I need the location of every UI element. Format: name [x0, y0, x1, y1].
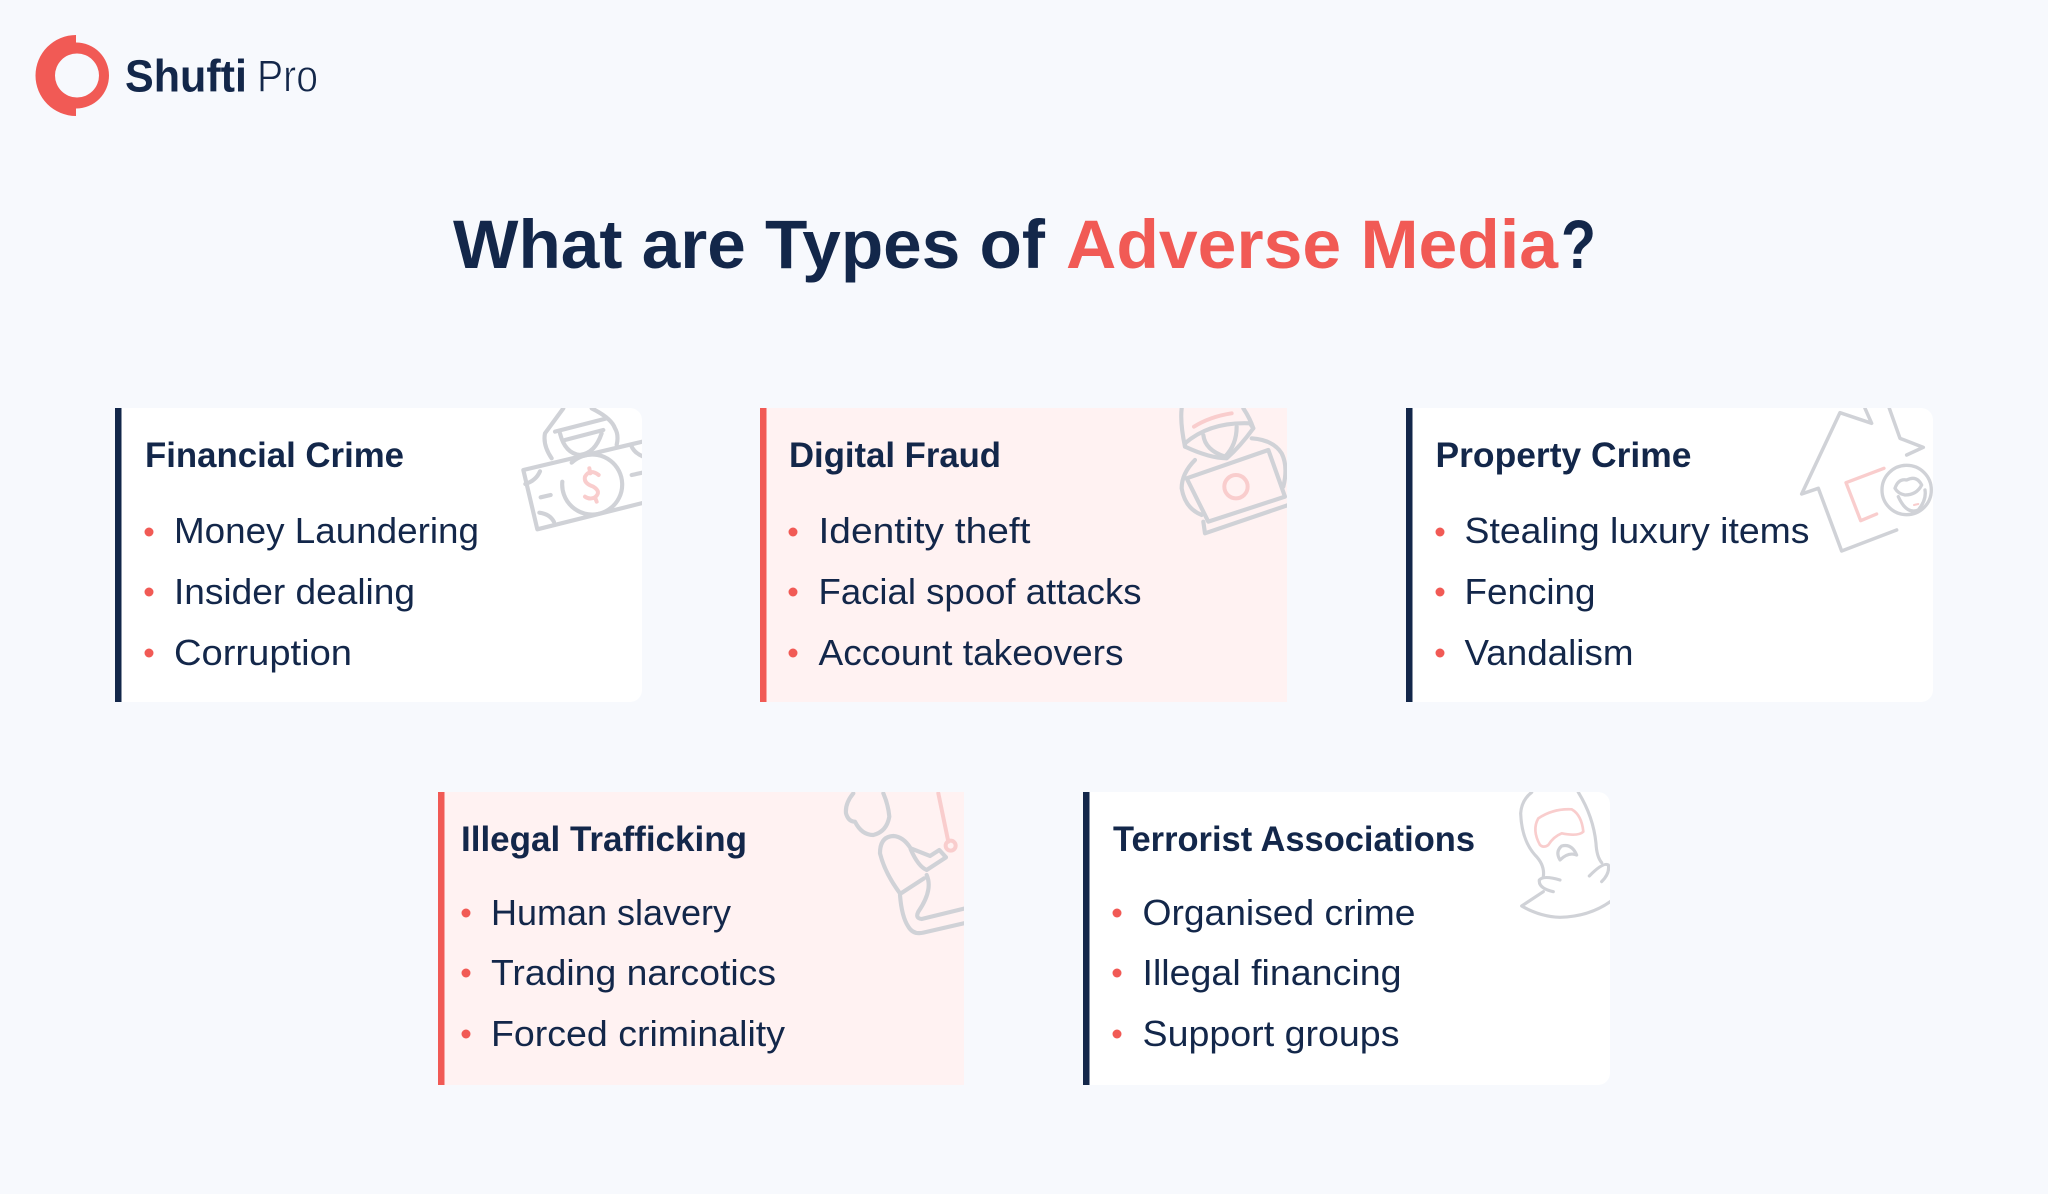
list: Facial spoof attacks	[818, 571, 1142, 612]
list	[788, 510, 1142, 673]
icon: balaclava head	[1521, 792, 1612, 917]
title: Adverse Media	[1066, 206, 1559, 283]
heading: Digital Fraud	[789, 436, 1001, 475]
logo: Shufti Pro	[36, 35, 318, 116]
icon: kneeling person and whip	[846, 793, 967, 933]
logo wordmark	[125, 50, 318, 102]
panel: Illegal Trafficking	[438, 792, 967, 1085]
list: Trading narcotics	[491, 952, 776, 993]
icon: thief with money	[523, 408, 647, 529]
icon: house with burglar	[1802, 408, 1931, 551]
list: Account takeovers	[818, 632, 1124, 673]
list	[1436, 510, 1810, 673]
logo wordmark: Pro	[257, 50, 318, 102]
heading: Financial Crime	[145, 436, 404, 475]
list: Forced criminality	[491, 1013, 785, 1054]
panel: Financial Crime	[115, 408, 647, 702]
panel: Terrorist Associations	[1083, 792, 1612, 1085]
list	[462, 892, 785, 1054]
list: Human slavery	[491, 892, 731, 933]
list: Illegal financing	[1142, 952, 1402, 993]
logo mark: red ring	[36, 35, 109, 116]
list	[144, 510, 479, 673]
icon: hacker with laptop	[1181, 408, 1288, 533]
list: Money Laundering	[174, 510, 479, 551]
list: Support groups	[1142, 1013, 1400, 1054]
panel: Digital Fraud	[760, 408, 1288, 702]
list: Organised crime	[1142, 892, 1416, 933]
list: Insider dealing	[174, 571, 415, 612]
list: Stealing luxury items	[1464, 510, 1810, 551]
list: Identity theft	[818, 510, 1030, 551]
panel: Property Crime	[1406, 408, 1933, 702]
list: Fencing	[1464, 571, 1596, 612]
heading: Terrorist Associations	[1113, 820, 1475, 859]
list	[1112, 892, 1416, 1054]
heading: Illegal Trafficking	[461, 820, 747, 859]
logo wordmark: Shufti	[125, 50, 247, 102]
title: ?	[1561, 206, 1596, 283]
list: Vandalism	[1464, 632, 1634, 673]
title: What are Types of	[453, 206, 1046, 283]
list: Corruption	[174, 632, 352, 673]
heading: Property Crime	[1436, 436, 1692, 475]
